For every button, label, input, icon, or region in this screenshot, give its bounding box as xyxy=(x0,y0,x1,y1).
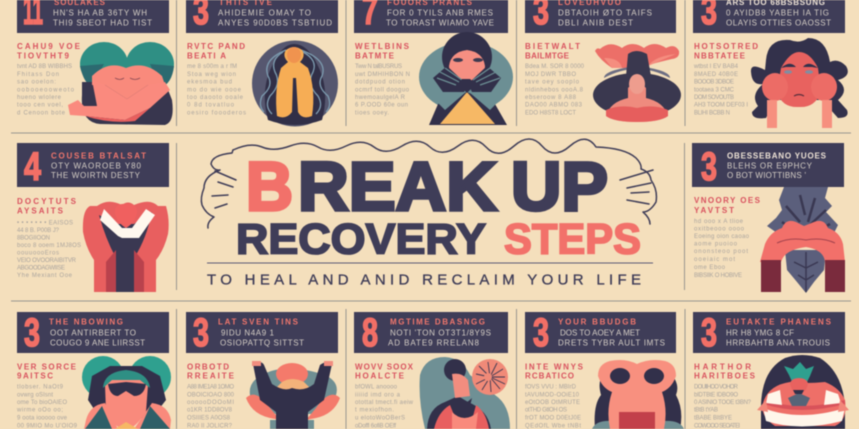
body text: hwemoaulgelA R xyxy=(355,95,406,101)
body text: boco 8 ooem 1MJ8OS xyxy=(17,243,81,249)
step header xyxy=(692,143,844,189)
step header: BLEHS OR E9PHCY xyxy=(727,162,813,170)
step header: 0 AYIDB8 YABEH IA TIG xyxy=(726,8,829,18)
body text: 6 P.OOD 60e oun xyxy=(355,102,408,108)
step header: HR H8 YMG 8 CF xyxy=(726,328,794,338)
icon: hands and leaves xyxy=(760,187,845,293)
body text: oooooDOOoMI xyxy=(187,400,234,406)
subheading: RCBATICO xyxy=(525,372,574,380)
step header: O BOT WIOTTIBNS ' xyxy=(727,171,806,180)
body text xyxy=(17,64,75,116)
step header xyxy=(186,311,338,355)
body text: tBtB tYAB xyxy=(694,408,718,414)
body text: DOM SOVOUTB xyxy=(694,95,734,101)
subheading xyxy=(187,362,235,380)
body text xyxy=(525,64,585,116)
subheading: WETLBINS xyxy=(355,42,410,51)
body text xyxy=(187,64,246,116)
subheading: 9AITSC xyxy=(17,372,53,380)
banner outline xyxy=(201,139,656,228)
step header: 3 xyxy=(701,311,717,355)
subheading: BIETWALT xyxy=(525,42,580,51)
step header: HN'S HA AB 36TY WH xyxy=(53,8,147,18)
subheading xyxy=(525,362,584,380)
subheading xyxy=(694,196,761,215)
body text: tvnt AD 8B WIBBHS xyxy=(17,64,72,70)
body text xyxy=(694,384,752,429)
icon: woman holding face xyxy=(751,38,848,128)
panel: top 4 xyxy=(525,0,681,122)
subheading xyxy=(525,42,580,60)
body text: ekesmoa bud xyxy=(187,80,232,86)
subheading: BAILMTGE xyxy=(525,52,570,60)
step header xyxy=(354,0,508,33)
body text xyxy=(693,64,748,116)
subheading: YAVTST xyxy=(694,206,734,215)
step header: OBESSEBANO YUOES xyxy=(727,152,827,160)
panel: top 1 xyxy=(17,0,174,125)
body text: aome puoioo xyxy=(694,242,738,248)
body text: d Cenoon bote xyxy=(17,110,66,116)
icon: embracing couple xyxy=(68,42,174,125)
body text: otottal tmect.fi aeiw xyxy=(355,400,414,406)
body text: ooeiaic mot xyxy=(694,257,735,263)
step header xyxy=(17,143,169,189)
step header xyxy=(17,311,169,355)
subheading: BEATI A xyxy=(187,52,226,60)
panel: title banner xyxy=(201,139,656,288)
body text: ABGOODAGWIISE xyxy=(17,266,65,272)
body text: • • • • • • • EAISOS xyxy=(17,220,73,226)
body text: 0 8d tovatluo xyxy=(187,102,235,108)
body text: t mexiofhon. xyxy=(355,408,394,414)
step header xyxy=(693,0,845,33)
step header xyxy=(525,0,676,33)
subheading: VNOORY OES xyxy=(694,196,761,205)
body text: Stoa weg wion xyxy=(187,72,236,78)
subheading: HARITBOES xyxy=(694,372,756,380)
icon: woman with striped body xyxy=(757,355,849,429)
step header: OOT ANTIRBERT TO xyxy=(50,328,136,338)
step header: OTY WAOROEB Y80 xyxy=(51,162,142,170)
step header: AD BATE9 RRELAN8 xyxy=(388,338,480,348)
step header: COUGO 9 ANE LIIRSST xyxy=(50,338,145,348)
panel: bottom 4 xyxy=(525,311,684,429)
body text: u elotoWoOBerS xyxy=(355,415,405,421)
body text: MOJ DWR TBBO xyxy=(525,72,576,78)
body text: BOOOB 3DBOE xyxy=(694,80,734,86)
panel: top 3 xyxy=(354,0,513,125)
panel: bottom 1 xyxy=(16,311,171,429)
body text: dotdpuod otion xyxy=(355,80,405,86)
body text: oxitbeooo oooo xyxy=(694,226,745,232)
subheading xyxy=(355,362,414,380)
step header: DRETS TYBR AULT IMTS xyxy=(558,338,665,348)
step header: DBTAOIH ØTO TAIFS xyxy=(558,8,652,18)
subheading: HARTHOR xyxy=(694,362,751,372)
step header xyxy=(525,311,676,355)
step header: DBLI ANIB DEST xyxy=(558,18,633,28)
step header xyxy=(186,0,338,33)
step header: 8 xyxy=(362,311,378,355)
body text: iiiiid imd oro a xyxy=(355,392,401,398)
step header: NOTI 'TON OT3T1/8Y9S xyxy=(390,328,491,338)
subheading: CAHU9 VOE xyxy=(17,42,81,51)
body text: OSIIIES A0OS8 xyxy=(187,415,231,421)
subheading xyxy=(187,42,245,60)
icon: person with teal hair xyxy=(82,356,171,429)
body text: hd ooo x A tlioe xyxy=(694,219,744,225)
body text: eOtOOB OtMRUTE xyxy=(525,400,580,406)
body text xyxy=(525,384,581,429)
title: Up: UP xyxy=(511,148,608,225)
subtitle: TO HEAL AND ANID RECLAIM YOUR LIFE xyxy=(207,272,641,288)
step header: YOUR BBUDGB xyxy=(558,318,636,326)
subheading: WOVV SOOX xyxy=(355,362,414,372)
body text xyxy=(187,384,235,429)
title: Break: REAK xyxy=(298,148,497,225)
title: Steps: STEPS xyxy=(504,216,641,264)
body text: 8BOGIIOON xyxy=(17,236,50,242)
body text: sao ooelon: xyxy=(17,80,56,86)
body text: tioes ooey. xyxy=(355,110,389,116)
body text: 8MAED 40B0E xyxy=(694,72,738,78)
body text xyxy=(355,64,410,116)
body text: ome Eboo xyxy=(694,265,726,271)
body text xyxy=(16,384,78,429)
step header: ANYES 90D0BS TSBTIUD xyxy=(218,18,332,28)
body text: ononsteoo poot xyxy=(694,249,748,255)
body text: Yhe Mexiant Ooe xyxy=(17,273,73,279)
body text: tBABE BItBYE xyxy=(694,415,732,421)
body text: me 8 s00m a r fM xyxy=(187,64,237,70)
body text: oouuoooEros xyxy=(17,250,59,256)
panel: bottom 2 xyxy=(186,311,340,429)
panel: top 2 xyxy=(186,0,338,126)
step header: THE NBOWING xyxy=(49,318,123,326)
body text: A88 IME1A8 1OMO xyxy=(187,384,234,390)
body text: VEIO OVOORAIBITVR xyxy=(17,258,77,264)
subheading: TIOVTHT9 xyxy=(17,52,70,60)
subheading: HOTSOTRED xyxy=(694,42,758,51)
body text: AH3 TOOM DEF03 I xyxy=(694,102,748,108)
panel: middle left xyxy=(17,143,169,292)
subheading: BATMTE xyxy=(355,52,395,60)
body text: BIBSIIK O HOBIVE xyxy=(694,273,742,279)
step header: 9IDU N4A9 1 xyxy=(221,328,275,338)
body text: 0 ASINIO TOOE t3BN? xyxy=(694,400,752,406)
subheading xyxy=(355,42,410,60)
subheading: INTE WNYS xyxy=(525,362,584,372)
step header: 4 xyxy=(24,145,42,189)
body text: o1KR 1DD8OV8 xyxy=(187,408,233,414)
subheading xyxy=(17,197,77,216)
step header: MGTIME DBASNGG xyxy=(390,318,485,326)
subheading: AYSAITS xyxy=(17,206,64,216)
body text: tooo cen voel, xyxy=(17,102,63,108)
body text xyxy=(694,219,750,279)
step header: LAT SVEN TINS xyxy=(218,318,299,326)
body text: tlobser. NaOt9 xyxy=(17,384,64,390)
title: Break up B: B xyxy=(246,148,293,225)
step header: AHIDEMIE OMAY TO xyxy=(218,8,311,18)
step header: THE WOIRTN DESTY xyxy=(51,171,141,180)
body text: Fhitass Don xyxy=(17,72,59,78)
body text: DAO00 ABMO 083 xyxy=(525,102,583,108)
body text: tootaea 3 CMC xyxy=(694,88,735,94)
body text: frOT MOO D0EtJ0E xyxy=(525,415,581,421)
step header: FOR 0 TYILS ANB RMES xyxy=(387,8,493,18)
body text: fOVS VVU : MBIrD xyxy=(525,384,577,390)
body text: bIDTBtE IDBO9O xyxy=(694,392,738,398)
panel: bottom 5 xyxy=(693,311,849,429)
step header: DOS TO AOEY A MET xyxy=(560,328,640,338)
icon: person with burst xyxy=(420,357,510,429)
step header: OSIOPATTQ SITTST xyxy=(220,338,304,348)
subheading: NBBTATEE xyxy=(694,52,746,60)
step header: COUSEB BTALSAT xyxy=(51,152,146,160)
body text: Bdea M. SOR 8 0000 xyxy=(525,64,585,70)
step header: THI9 SBEOT HAD TIST xyxy=(53,18,152,28)
subheading: RREAITE xyxy=(187,372,235,380)
body text: wtbst I EV BAB4 xyxy=(693,64,739,70)
body text: uwt DMHIHBON N xyxy=(355,72,410,78)
step header: HRRBAHTB ANA TROUIS xyxy=(726,338,830,348)
step header: EUTAKTE PHANENS xyxy=(726,318,832,326)
subheading xyxy=(694,362,756,380)
icon: woman with coral fan xyxy=(593,44,681,122)
subheading: RVTC PAND xyxy=(187,42,245,51)
body text: 44 8 B. P00B J? xyxy=(17,228,60,234)
icon: hands holding heart xyxy=(83,202,169,292)
panel: top 5 xyxy=(693,0,848,128)
icon: figure with raised arms xyxy=(246,361,340,429)
subheading xyxy=(17,362,77,380)
body text: ome To bioOAlEO xyxy=(17,400,67,406)
body text: tAVUMOD-OOiE10 xyxy=(525,392,580,398)
subheading: DOCYTUTS xyxy=(17,197,77,206)
body text: Eoeing oion caoao xyxy=(694,234,750,240)
title: Recovery: RECOVERY xyxy=(236,216,486,264)
body text: ocmrf toll dooguo xyxy=(355,88,410,94)
icon: person covering face xyxy=(419,32,513,125)
body text: nldinhebos oooA.8 xyxy=(525,88,584,94)
subheading: HOALCTE xyxy=(355,372,405,380)
subheading: ORBOTD xyxy=(187,362,229,372)
panel: middle right xyxy=(692,143,845,293)
body text: mo do wie oooe xyxy=(187,88,242,94)
body text: EDO H8ST8 LOCT xyxy=(525,110,576,116)
panel: bottom 3 xyxy=(354,311,510,429)
step header: OLAYIS OTTIES OAOSST xyxy=(726,18,831,28)
body text: Tww N talBUSRUS xyxy=(355,64,402,70)
step header xyxy=(17,0,169,33)
body text: wirme oOo oo; xyxy=(16,408,63,414)
icon: figure from behind xyxy=(592,360,684,429)
body text: bfOWL anoooo xyxy=(355,384,398,390)
body text: DOUIIHOO VOHOR xyxy=(694,384,739,390)
body text: hueno wlolere xyxy=(17,95,62,101)
step header: TO TORAST WIAMO YAVE xyxy=(386,18,494,28)
body text: oobooeooweoto xyxy=(17,88,75,94)
step header xyxy=(693,311,845,355)
subheading: VER SORCE xyxy=(17,362,77,372)
subheading xyxy=(17,42,81,60)
body text: 9 oota iooooo ove xyxy=(17,415,68,421)
body text: BLIHI BCBB N xyxy=(694,110,730,116)
step header: 3 xyxy=(533,311,549,355)
step header xyxy=(354,311,508,355)
body text: too daooto ooale xyxy=(187,95,244,101)
body text: otTHD GtlOH OS xyxy=(525,408,567,414)
body text: ovwrg oSlsnt xyxy=(17,392,53,398)
subheading xyxy=(694,42,758,60)
body text xyxy=(355,384,414,429)
body text: ebseroow 8 A88 xyxy=(525,95,577,101)
body text: oesiro foooderos xyxy=(187,110,246,116)
step header: 3 xyxy=(701,145,717,189)
body text: tave oey sooplo xyxy=(525,80,580,86)
body text: OBOICIOAO 800 xyxy=(187,392,235,398)
icon: woman in circle xyxy=(252,40,338,126)
step header: 3 xyxy=(24,311,40,355)
step header: 3 xyxy=(193,311,209,355)
body text xyxy=(17,220,81,279)
